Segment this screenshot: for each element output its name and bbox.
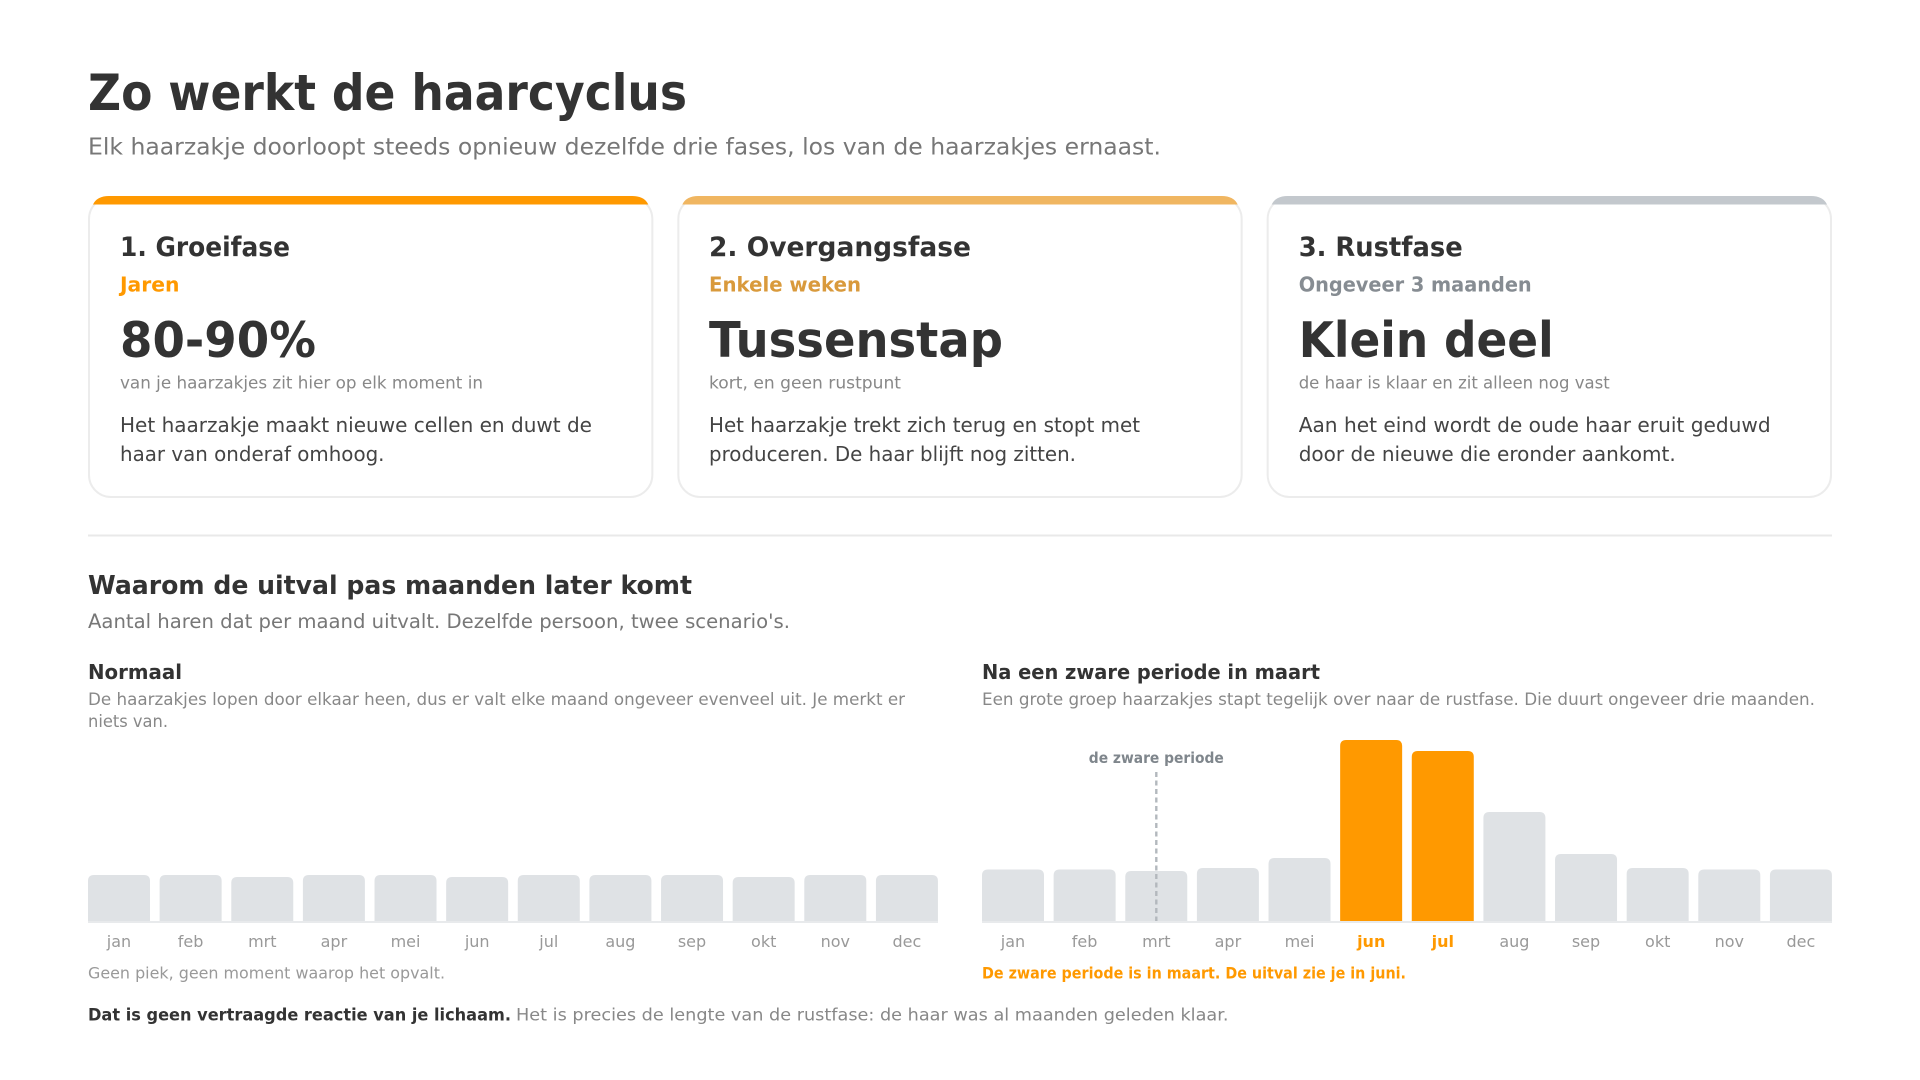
closing note	[88, 1006, 1228, 1026]
month labels: mrt	[1142, 932, 1171, 951]
chart description: Een grote groep haarzakjes stapt tegelijk over naar de rustfase. Die duurt ongeveer drie maanden.	[982, 690, 1815, 710]
month labels: mei	[1285, 932, 1314, 951]
panel: 2. Overgangsfase	[678, 196, 1242, 497]
month labels: mei	[391, 932, 420, 951]
phase big figure: Tussenstap	[709, 312, 1003, 369]
phase figure note: van je haarzakjes zit hier op elk moment in	[120, 374, 483, 392]
phase heading: 2. Overgangsfase	[709, 232, 971, 263]
month labels: mrt	[248, 932, 277, 951]
section subtitle: Aantal haren dat per maand uitvalt. Dezelfde persoon, twee scenario's.	[88, 610, 790, 633]
phase duration: Enkele weken	[709, 272, 861, 296]
panel: scenario after a heavy period	[982, 660, 1832, 983]
phase duration: Ongeveer 3 maanden	[1299, 272, 1532, 296]
month labels: jun	[464, 932, 490, 951]
closing note: Dat is geen vertraagde reactie van je lichaam.	[88, 1006, 511, 1026]
month labels	[106, 932, 921, 951]
panel: 1. Groeifase	[89, 196, 652, 497]
phase figure note: kort, en geen rustpunt	[709, 374, 902, 392]
chart heading: Normaal	[88, 660, 182, 684]
month labels: dec	[1787, 932, 1815, 951]
month labels: dec	[893, 932, 921, 951]
phase figure note: de haar is klaar en zit alleen nog vast	[1299, 374, 1610, 392]
panel: normal scenario	[88, 660, 938, 983]
month labels: feb	[178, 932, 203, 951]
card top bar	[682, 196, 1238, 204]
month labels: jan	[1000, 932, 1025, 951]
phase description: produceren. De haar blijft nog zitten.	[709, 442, 1076, 466]
month labels: nov	[821, 932, 850, 951]
month labels: sep	[678, 932, 706, 951]
panel: 3. Rustfase	[1268, 196, 1831, 497]
title: Zo werkt de haarcyclus	[88, 64, 687, 122]
month labels: jan	[106, 932, 131, 951]
closing note: Het is precies de lengte van de rustfase: de haar was al maanden geleden klaar.	[516, 1006, 1228, 1026]
month labels: apr	[321, 932, 348, 951]
bar chart: normal	[88, 875, 938, 951]
month labels: okt	[751, 932, 776, 951]
section heading: Waarom de uitval pas maanden later komt	[88, 571, 692, 601]
phase description	[709, 413, 1140, 466]
phase description	[1299, 413, 1771, 466]
bar chart: heavy period	[982, 740, 1832, 951]
card top bar	[1272, 196, 1827, 204]
phase duration: Jaren	[118, 272, 180, 296]
phase description: Aan het eind wordt de oude haar eruit geduwd	[1299, 413, 1771, 437]
month labels: sep	[1572, 932, 1600, 951]
card top bar	[93, 196, 648, 204]
phase description: Het haarzakje trekt zich terug en stopt met	[709, 413, 1140, 437]
month labels: okt	[1645, 932, 1670, 951]
month labels: jul	[538, 932, 558, 951]
phase big figure: 80-90%	[120, 312, 316, 369]
month labels: apr	[1215, 932, 1242, 951]
month labels: jun	[1356, 932, 1385, 951]
marker line: de zware periode	[1155, 772, 1158, 921]
month labels: feb	[1072, 932, 1097, 951]
chart description: De haarzakjes lopen door elkaar heen, dus er valt elke maand ongeveer evenveel uit. Je merkt er	[88, 690, 905, 710]
chart caption: De zware periode is in maart. De uitval zie je in juni.	[982, 964, 1406, 983]
phase description	[120, 413, 592, 466]
chart description	[88, 690, 905, 732]
highlighted bars: jun and jul	[1340, 740, 1474, 921]
month labels	[1000, 932, 1815, 951]
month labels: aug	[605, 932, 635, 951]
month labels: jul	[1431, 932, 1454, 951]
phase description: haar van onderaf omhoog.	[120, 442, 384, 466]
phase heading: 1. Groeifase	[120, 232, 290, 263]
chart heading: Na een zware periode in maart	[982, 660, 1320, 684]
marker label: de zware periode	[1089, 749, 1224, 767]
month labels: aug	[1499, 932, 1529, 951]
phase description: Het haarzakje maakt nieuwe cellen en duwt de	[120, 413, 592, 437]
phase big figure: Klein deel	[1299, 312, 1554, 369]
chart description: niets van.	[88, 712, 168, 732]
phase heading: 3. Rustfase	[1299, 232, 1463, 263]
phase description: door de nieuwe die eronder aankomt.	[1299, 442, 1676, 466]
subtitle: Elk haarzakje doorloopt steeds opnieuw dezelfde drie fases, los van de haarzakjes ernaast.	[88, 132, 1161, 160]
month labels: nov	[1715, 932, 1744, 951]
chart caption: Geen piek, geen moment waarop het opvalt.	[88, 964, 445, 983]
